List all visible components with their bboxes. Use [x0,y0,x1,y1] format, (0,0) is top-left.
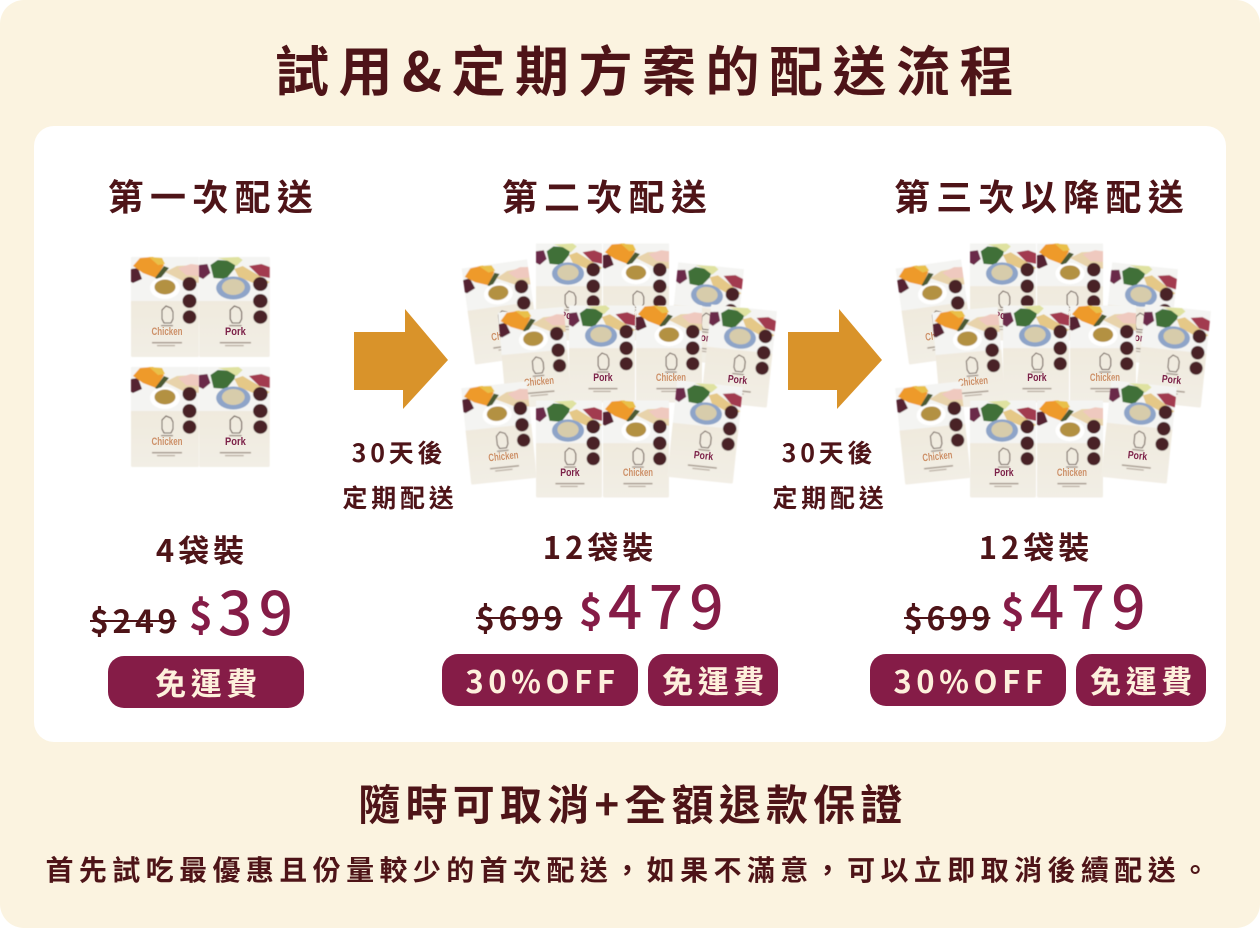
heading: first delivery: 第一次配送 [108,169,319,221]
packet: chicken: Chicken [152,326,183,338]
packet: chicken: Chicken [623,310,653,322]
packet: pork: Pork [694,331,715,345]
packet: chicken [131,257,199,357]
packet: chicken: Chicken [922,449,953,464]
packet: chicken: Chicken [1057,467,1087,479]
packet: pork: Pork [1128,331,1149,345]
packet: pork: Pork [225,436,246,448]
packet: chicken [1070,306,1136,402]
packet: pork: Pork [994,310,1014,322]
packet: pork: Pork [225,326,246,338]
packet: chicken: Chicken [958,375,989,389]
packet: pork [701,304,777,408]
packet: pork [667,380,743,484]
arrow caption: subscription delivery: 定期配送 [772,479,888,515]
badge: free shipping: 免運費 [1090,657,1197,702]
heading: third delivery onward: 第三次以降配送 [894,169,1190,221]
packet: pork [199,367,270,467]
badge: 30% off: 30%OFF [465,657,620,702]
sale price: 39 [218,566,299,653]
sale price: 479 [1030,560,1152,647]
badge: free shipping: 免運費 [662,657,769,702]
heading: second delivery: 第二次配送 [502,169,713,221]
packet: chicken [636,306,702,402]
panel: delivery steps [34,126,1226,742]
badge: free shipping [108,656,304,708]
packet: chicken: Chicken [152,436,183,448]
packet: chicken [895,381,971,485]
badge: 30% off: 30%OFF [893,657,1048,702]
quantity: 12 bags: 12袋裝 [979,523,1093,568]
product image: 12 bags, third delivery onward [895,244,1211,498]
packet: chicken [131,367,199,467]
packet: chicken [1037,244,1103,340]
packet: chicken: Chicken [491,328,522,344]
packet: chicken [498,307,572,409]
packet: chicken [603,244,669,340]
original price: $249 [90,597,176,643]
packet: pork [536,244,602,340]
packet: chicken: Chicken [1057,310,1087,322]
arrow caption: 30 days later: 30天後 [782,434,876,470]
packet: pork: Pork [1127,449,1148,463]
packet: pork: Pork [1161,373,1182,387]
product image: 12 bags, second delivery [461,244,777,498]
badge: 30% off [870,654,1066,706]
packet: chicken: Chicken [623,467,653,479]
packet: chicken [932,307,1006,409]
price: third delivery [904,560,1152,647]
arrow caption: subscription delivery: 定期配送 [342,479,458,515]
packet: pork: Pork [994,467,1014,479]
title: 試用&定期方案的配送流程 [275,28,1023,107]
packet: chicken: Chicken [656,372,686,384]
packet: chicken [603,400,669,498]
packet: chicken [462,259,540,365]
sale price symbol: $ [189,584,213,642]
packet: pork [569,306,635,402]
badge: 30% off [442,654,638,706]
packet: pork [970,400,1036,498]
arrow: second to third delivery [788,309,882,409]
sale price symbol: $ [1001,580,1025,638]
packet: pork: Pork [560,310,580,322]
packet: pork [199,257,270,357]
packet: chicken: Chicken [925,328,956,344]
guarantee description: 首先試吃最優惠且份量較少的首次配送，如果不滿意，可以立即取消後續配送。 [45,849,1214,889]
packet: pork [1102,262,1178,366]
packet: chicken [1037,400,1103,498]
arrow: first to second delivery [354,309,448,409]
quantity: 12 bags: 12袋裝 [543,523,657,568]
packet: chicken: Chicken [488,449,519,464]
packet: pork [1101,380,1177,484]
packet: chicken [896,259,974,365]
packet: chicken: Chicken [1090,372,1120,384]
price: first delivery [90,566,299,653]
original price: $699 [476,594,562,640]
packet: pork [536,400,602,498]
packet: pork: Pork [593,372,613,384]
packet: pork [668,262,744,366]
packet: chicken [461,381,537,485]
badge: free shipping: 免運費 [155,659,262,704]
packet: pork: Pork [727,373,748,387]
packet: pork: Pork [693,449,714,463]
packet: pork: Pork [560,467,580,479]
product image: 4 bags [131,257,270,467]
packet: chicken: Chicken [524,375,555,389]
arrow caption: 30 days later: 30天後 [352,434,446,470]
sale price symbol: $ [579,580,603,638]
guarantee heading: 隨時可取消+全額退款保證 [358,772,908,833]
packet: pork [970,244,1036,340]
price: second delivery [476,560,730,647]
packet: pork [1135,304,1211,408]
packet: pork: Pork [1027,372,1047,384]
packet: pork [1003,306,1069,402]
sale price: 479 [608,560,730,647]
original price: $699 [904,594,990,640]
quantity: 4 bags: 4袋裝 [156,526,248,571]
